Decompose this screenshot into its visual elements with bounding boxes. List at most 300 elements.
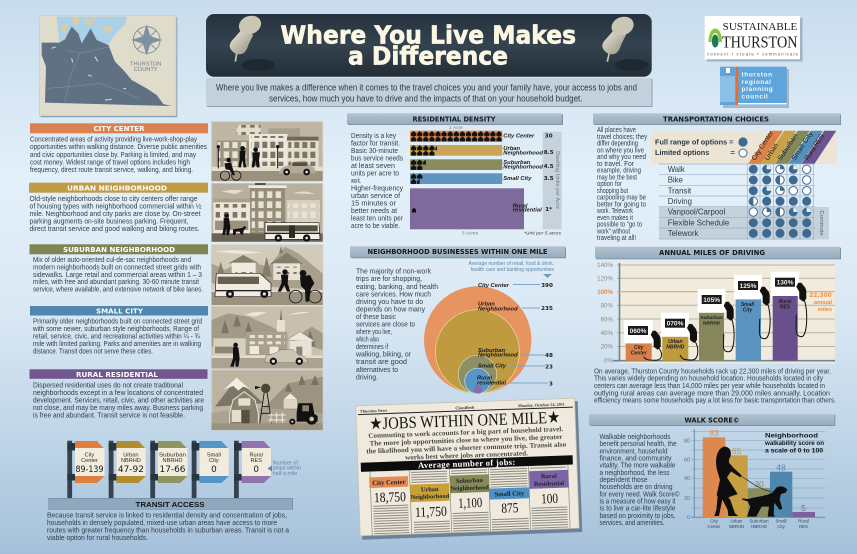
pump: rural [771,272,807,361]
density chart: 5 Acres [462,230,479,236]
logo: Thurston Regional Planning Council: council [742,94,768,100]
choices table [659,164,829,240]
nested circles chart [424,261,554,394]
sign: city center: Center [81,458,98,464]
density text: work. [350,178,361,185]
newspaper: jobs within one mile: Classifieds [455,405,475,410]
businesses text: services are close to [356,322,415,328]
businesses text: where you live, [355,329,392,336]
panel: rural residential [30,369,208,420]
jobs: suburban: Neighborhood [450,484,489,493]
heading [593,113,841,125]
pump: suburban: NBRHD [703,320,721,326]
heading: RESIDENTIAL DENSITY [412,115,496,123]
panel: small city: Primarily older neighborhoods built on connected street grid [33,318,202,325]
pump bar chart: 22,300 [809,292,832,299]
sign: urban: 47-92 [118,465,144,475]
walk text: Walkable neighborhoods [600,434,671,441]
density chart: Neighborhood [503,151,543,157]
panel: transit access [47,498,293,542]
walk score chart: 0 [687,515,690,521]
driving text: This varies widely depending on household location. Households located in city [594,376,824,383]
businesses text: alternatives to [356,367,398,374]
density chart: Neighborhood [503,164,543,170]
title banner [206,13,652,77]
walk text: a neighborhood, the less [600,470,670,477]
driving text: On average, Thurston County households rack up 22,300 miles of driving per year. [594,368,831,375]
jobs: city center [369,476,410,534]
heading [595,247,841,259]
title banner: Where You Live Makes [280,20,576,50]
walk score chart: 30 [754,479,764,489]
jobs: rural: 100 [541,492,558,507]
businesses text: depends on how many [356,306,426,313]
heading [350,246,566,258]
title banner: a Difference [348,42,508,70]
logo: Thurston Regional Planning Council: planning [742,86,773,93]
pump bar chart: 20% [601,344,613,351]
transport text: may be the best [597,174,637,181]
density chart [410,125,562,236]
density chart: City Center [503,134,535,140]
panel: urban neighborhood: direct transit service and good walking and biking routes. [30,226,200,233]
nested circles chart: Neighborhood [478,353,518,359]
choices table: Flexible Schedule [668,218,729,227]
driving text: efficiency means some households pay a lot less for basic transportation than others. [594,398,836,405]
walk score chart: Rural [798,518,809,524]
transport text [596,127,647,242]
pump: rural: Rural [779,299,792,305]
panel: rural residential: not close, and may be many miles away. Business parking [33,405,203,412]
panel: suburban neighborhood [30,244,208,294]
pump: city center: 060% [630,328,647,335]
subtitle intro [206,78,652,107]
businesses text: trips are for shopping, [356,276,422,283]
transport text: carpooling may be [597,194,646,202]
pump bar chart: 0% [604,358,613,364]
panel: suburban neighborhood: SUBURBAN NEIGHBORHOOD [63,245,175,254]
businesses text [355,269,438,381]
panel: urban neighborhood [29,183,208,233]
walk score chart [684,428,825,529]
businesses text: eating, banking, and health [356,284,438,291]
pump: small city: City [743,308,752,314]
nested circles chart: 390 [541,283,553,289]
nested circles chart: Rural [477,375,492,381]
walk text: environment, household [600,448,668,455]
density text: 15 minutes or [351,200,397,208]
density chart: Rural [513,203,528,209]
jobs: urban: Urban [421,486,439,494]
panel: small city: distance. Transit does not serve these cities. [33,349,153,356]
category bands [748,129,836,164]
pump bar chart: 120% [597,276,613,282]
density chart: Urban [503,146,521,152]
density text: units per acre to [351,170,399,178]
choices table: Driving [668,197,692,206]
panel: city center [30,123,208,174]
sign: small city: City [209,458,219,464]
walk score chart: 65 [732,446,741,456]
nested circles chart: 235 [541,306,553,312]
pump: city center: Center [631,350,648,356]
pump: small city: 125% [740,283,757,290]
panel: suburban neighborhood: service, where available, and extensive network of bike lanes. [33,287,203,294]
density chart: 4.5 [544,164,554,170]
newspaper: jobs within one mile [356,398,582,540]
density text: urban service of [351,193,400,200]
legend [651,131,837,164]
businesses text: driving. [356,374,378,381]
nested circles chart: City Center [478,283,510,289]
transport text: differ depending [597,140,638,148]
newspaper: jobs within one mile: the likelihood you will have a shorter commute trip. Transit also [366,441,567,456]
transport text: work" without [596,228,630,235]
pump: urban [661,313,698,361]
transport text: traveling at all! [597,235,636,242]
nested circles chart: health care and banking opportunities [471,267,554,273]
panel: neighborhood businesses [350,246,566,394]
panel: suburban neighborhood: Mix of older auto-oriented cul-de-sac neighborhoods and [33,257,191,264]
panel: small city: SMALL CITY [96,307,144,316]
walk score chart: Suburban [749,518,769,524]
transport text: to travel. For [597,161,635,168]
density text: Basic 30-minute [351,148,398,155]
panel: transportation choices [593,113,841,242]
pump: suburban: Suburban [700,315,723,321]
density chart: Small City [503,176,532,182]
pump: small city: Small [741,302,755,308]
panel: small city [30,306,208,356]
panel: city center: Concentrated areas of activity providing live-work-shop-play [30,137,197,144]
density text [350,133,404,230]
sign: small city [192,441,229,499]
subtitle intro: Where you live makes a difference when it comes to the travel choices you and your family have, your access to jobs and [216,82,637,94]
density chart: 3.5 [544,176,554,182]
logo: Thurston Regional Planning Council [720,67,789,108]
pump: small city [734,275,770,361]
driving text [594,368,836,405]
illustration: rural residential scene [212,370,323,430]
jobs: suburban [449,468,491,532]
walk score chart: NBRHD [729,524,744,529]
density chart: 8.5 [544,150,554,156]
panel: small city: mile with limited parking. Parks and amenities are in walking [33,341,201,348]
pump bar chart: 80% [601,302,613,310]
nested circles chart: 23 [545,364,553,370]
density text: Density is a key [351,133,397,140]
jobs: urban: 11,750 [415,505,447,521]
panel: urban neighborhood: parking augments on-site business parking. Frequent, [30,219,189,226]
choices table: Telework [668,229,699,238]
category bands: Urban [764,142,780,162]
transport text: on where you live [597,147,644,154]
heading: WALK SCORE© [684,416,740,424]
walk text: benefit personal health, the [600,441,677,448]
newspaper: jobs within one mile: Thurston News [360,408,388,414]
walk score chart: 5 [801,503,806,513]
panel: rural residential: is free and abundant. Transit service is not feasible. [33,413,185,420]
newspaper: jobs within one mile: The more job opportunities close to where you live, the greater [369,433,563,448]
pump bar chart: 140% [597,262,613,269]
pump: urban: 070% [667,321,684,328]
density text: factor for transit. [351,140,400,148]
panel: small city: with some newer, suburban style neighborhoods. Range of [32,326,199,333]
legend: Limited options [655,148,709,157]
walk score chart: 60 [684,458,690,464]
transport text: option for [597,181,623,188]
transport text: even makes it [597,215,633,222]
jobs: city center: City Center [372,479,406,487]
walk score chart: 83 [709,428,719,438]
walk score chart: City [777,524,786,529]
sign: city center: 89-139 [76,465,104,475]
category bands: Suburban [777,133,799,162]
sign: suburban: NBRHD [163,458,182,464]
sign: suburban: 17-66 [160,465,186,475]
panel: city center: opportunities within walking distance. Diverse public amenities [30,144,208,151]
choices table: Transit [668,186,692,195]
walk score chart: Neighborhood [765,433,818,440]
illustration: city center street scene [212,122,323,181]
nested circles chart: 48 [545,353,553,359]
sign: rural [234,441,271,499]
choices table: Bike [668,176,683,185]
transport text: work. Telework [596,208,633,215]
transport text: better for going to [597,201,646,208]
density chart: *Unit per 5 acres [524,230,562,236]
pump: urban: Urban [668,339,683,345]
transport text: All places have [597,127,636,134]
map: Thurston County: THURSTON [130,62,161,68]
walk score chart: walkability score on [764,440,824,447]
subtitle intro: services, how much you have to drive and the impacts of that on your household budget. [269,94,582,104]
jobs: small city [488,466,531,531]
businesses text: driving you have to do [356,299,423,306]
density text: better needs at [351,208,397,215]
category bands: Small City [791,130,815,162]
panel: urban neighborhood: URBAN NEIGHBORHOOD [67,183,167,192]
walk score chart: Small [776,518,787,524]
note: number of stops [268,460,301,477]
heading [589,414,835,426]
businesses text: which also [355,337,379,344]
density text: least ten units per [351,216,404,222]
nested circles chart: Average number of retail, food & drink, [468,261,554,267]
transport text: shopping but [597,188,628,195]
panel: city center: and civic opportunities close by. Parking is limited, and may [30,152,197,159]
choices table: Walk [668,165,685,174]
nested circles chart: Neighborhood [478,306,518,312]
nested circles chart: Small City [478,364,507,370]
nested circles chart: residential [477,381,506,387]
panel: small city: retail, service, civic, and recreational activities within ¼ - ¾ [33,334,200,341]
density chart: Suburban [503,160,531,166]
panel: annual miles of driving [594,247,841,405]
transit access stop signs [67,441,271,499]
sign: small city: Small [207,452,221,458]
sign: suburban [150,441,188,499]
businesses text: determines if [356,344,388,351]
jobs: rural: Residential [534,480,564,488]
pump bar chart: miles [818,307,832,313]
walk score chart: City [710,518,719,524]
density chart: 30 [545,134,553,140]
pump: rural: 130% [777,280,794,287]
pump: rural: RES [780,304,791,310]
businesses text: walking, biking, or [355,352,412,359]
jobs: small city: 875 [501,501,519,517]
panel: suburban neighborhood: miles, with free and abundant parking. 30-60 minute transit [33,279,199,286]
sign: small city: 0 [211,465,217,475]
density chart: Dwelling Units per Acre [554,151,560,209]
panel: rural residential: neighborhoods except in a few locations of concentrated [33,390,203,397]
walk text: for every need. Walk Score© [600,490,680,498]
legend: Full range of options = [655,137,733,146]
icon: woman walking dog [714,447,787,517]
walk score chart: Urban [731,518,743,524]
walk score chart: a scale of 0 to 100 [765,447,823,454]
walk text: is to live a car-lite lifestyle [600,506,676,513]
density text: bus service needs [351,156,404,162]
transport text: travel choices; they [597,134,647,141]
newspaper: jobs within one mile: Average number of jobs: [418,457,516,470]
panel: city center: CITY CENTER [94,124,145,133]
panel: rural residential: development. Services, retail, civic, and other activities are [33,398,204,405]
logo: Thurston Regional Planning Council: regional [742,79,772,86]
heading: ANNUAL MILES OF DRIVING [659,249,765,257]
sign: rural: Rural [250,452,263,458]
transport text: and why you need [597,154,646,161]
walk text: finance, and community [600,456,672,462]
walk score chart: 80 [684,438,690,444]
nested circles chart: 3 [549,382,553,388]
sign: rural: RES [250,458,262,464]
panel: rural residential: Dispersed residential uses do not create traditional [33,382,183,389]
walk score chart: RES [799,524,808,529]
illustration: suburban neighborhood scene [212,245,323,305]
panel: city center: cost money. Widest range of travel options includes high [30,159,190,166]
choices table: Vanpool/Carpool [668,208,725,217]
legend: = [730,148,735,157]
nested circles chart: Urban [478,302,495,308]
sign: urban [109,441,146,499]
heading: NEIGHBORHOOD BUSINESSES WITHIN ONE MILE [368,248,548,256]
note: number of stops: stops within [273,466,301,472]
newspaper: jobs within one mile: works best where jobs are concentrated. [405,449,528,462]
panel: transit access: routes with greater frequency than households in suburban areas. Transit is not a [47,528,289,535]
pump bar chart: 60% [601,316,613,323]
density text: at least seven [351,163,395,170]
density chart: residential [513,208,542,214]
transport text: possible to "go to [597,222,642,228]
pump: suburban: 105% [703,297,720,304]
walk score chart: 40 [684,476,690,482]
pump: suburban [698,289,734,361]
panel: transit access: TRANSIT ACCESS [136,500,204,509]
pump: city center [624,320,662,361]
newspaper: jobs within one mile: Monday, October 24, 2011 [518,402,565,408]
walk text [600,434,680,527]
panel: suburban neighborhood: sidewalks. Large retail and commercial areas within 1 – 3 [33,272,202,279]
note: number of stops: half a mile [273,471,297,477]
pump bar chart [597,262,835,364]
jobs: city center: 18,750 [374,490,406,506]
illustration: urban neighborhood scene [212,183,323,242]
choices table: Commute [818,210,824,236]
panel: transit access: viable option for rural households. [47,535,148,542]
logo: Sustainable Thurston: THURSTON [722,32,798,52]
transport text: example, driving [597,168,641,174]
logo: Sustainable Thurston [705,16,802,62]
panel: rural residential: RURAL RESIDENTIAL [76,370,158,379]
density chart: 1 Acre [449,125,463,131]
walk text: based on proximity to jobs, [600,513,676,520]
panel: transit access: households in densely populated, mixed-use urban areas have access to more [47,520,277,527]
walk score chart: 20 [684,496,690,502]
jobs: suburban: 1,100 [458,496,482,512]
logo: Sustainable Thurston: connect • create • communicate [707,52,799,56]
walk text: vitality. The more walkable [600,463,676,470]
panel: urban neighborhood: of housing types with neighborhood commercial within ½ [30,203,202,211]
sign: suburban: Suburban [159,452,186,458]
note: number of stops: Number of [273,460,298,466]
newspaper: jobs within one mile: ★JOBS WITHIN ONE MILE★ [369,408,561,433]
sign: urban: NBRHD [121,458,141,464]
walk text: dependent those [600,477,648,484]
pump: urban: NBRHD [666,344,685,350]
heading [347,113,563,125]
newspaper: jobs within one mile: Commuting to work accounts for a big part of household travel. [368,425,564,440]
logo: Thurston Regional Planning Council: thurston [742,72,773,78]
walk score chart: 48 [776,462,786,472]
jobs: suburban: Suburban [456,477,483,485]
density text: acre to be viable. [351,223,400,230]
pump bar chart: 40% [601,330,613,337]
pump bar chart: 100% [597,289,613,296]
sign: urban: Urban [123,452,139,458]
density text: Higher-frequency [351,186,404,192]
map: Thurston County [39,16,177,117]
density chart: 1* [545,207,552,213]
walk score chart: NBRHD [751,524,767,529]
pump bar chart: annual [814,300,832,306]
panel: city center: frequency, direct route transit service, walking, and biking. [30,167,193,174]
driving text: centers can average less than 14,000 miles per year while households located in [594,383,825,390]
panel: suburban neighborhood: modern neighborhoods built on connected street grids with [33,264,201,271]
businesses text: of these basic [356,314,397,321]
walk text: households are on driving [600,484,673,491]
panel: urban neighborhood: Old-style neighborhoods close to city centers offer range [30,196,198,203]
heading: TRANSPORTATION CHOICES [663,115,769,123]
walk text: services, and amenities. [600,520,665,527]
category bands: City Center [751,129,776,162]
pump: city center: City [634,345,644,351]
jobs: urban [409,469,451,534]
driving text: outlying rural areas can average more than 29,000 miles annually. Location [594,390,830,397]
sign: city center [67,441,104,499]
logo: Sustainable Thurston: SUSTAINABLE [723,22,797,33]
businesses text: transit are good [356,359,407,366]
jobs: urban: Neighborhood [411,493,450,501]
jobs: rural: Rural [541,473,557,480]
jobs: small city: Small City [494,490,525,498]
category bands: Rural RES [804,133,826,162]
jobs: rural [529,465,570,529]
panel: walk score [589,414,835,529]
map: Thurston County: COUNTY [134,67,158,73]
panel: transit access: Because transit service is linked to residential density and concentration of jobs, [47,513,287,520]
